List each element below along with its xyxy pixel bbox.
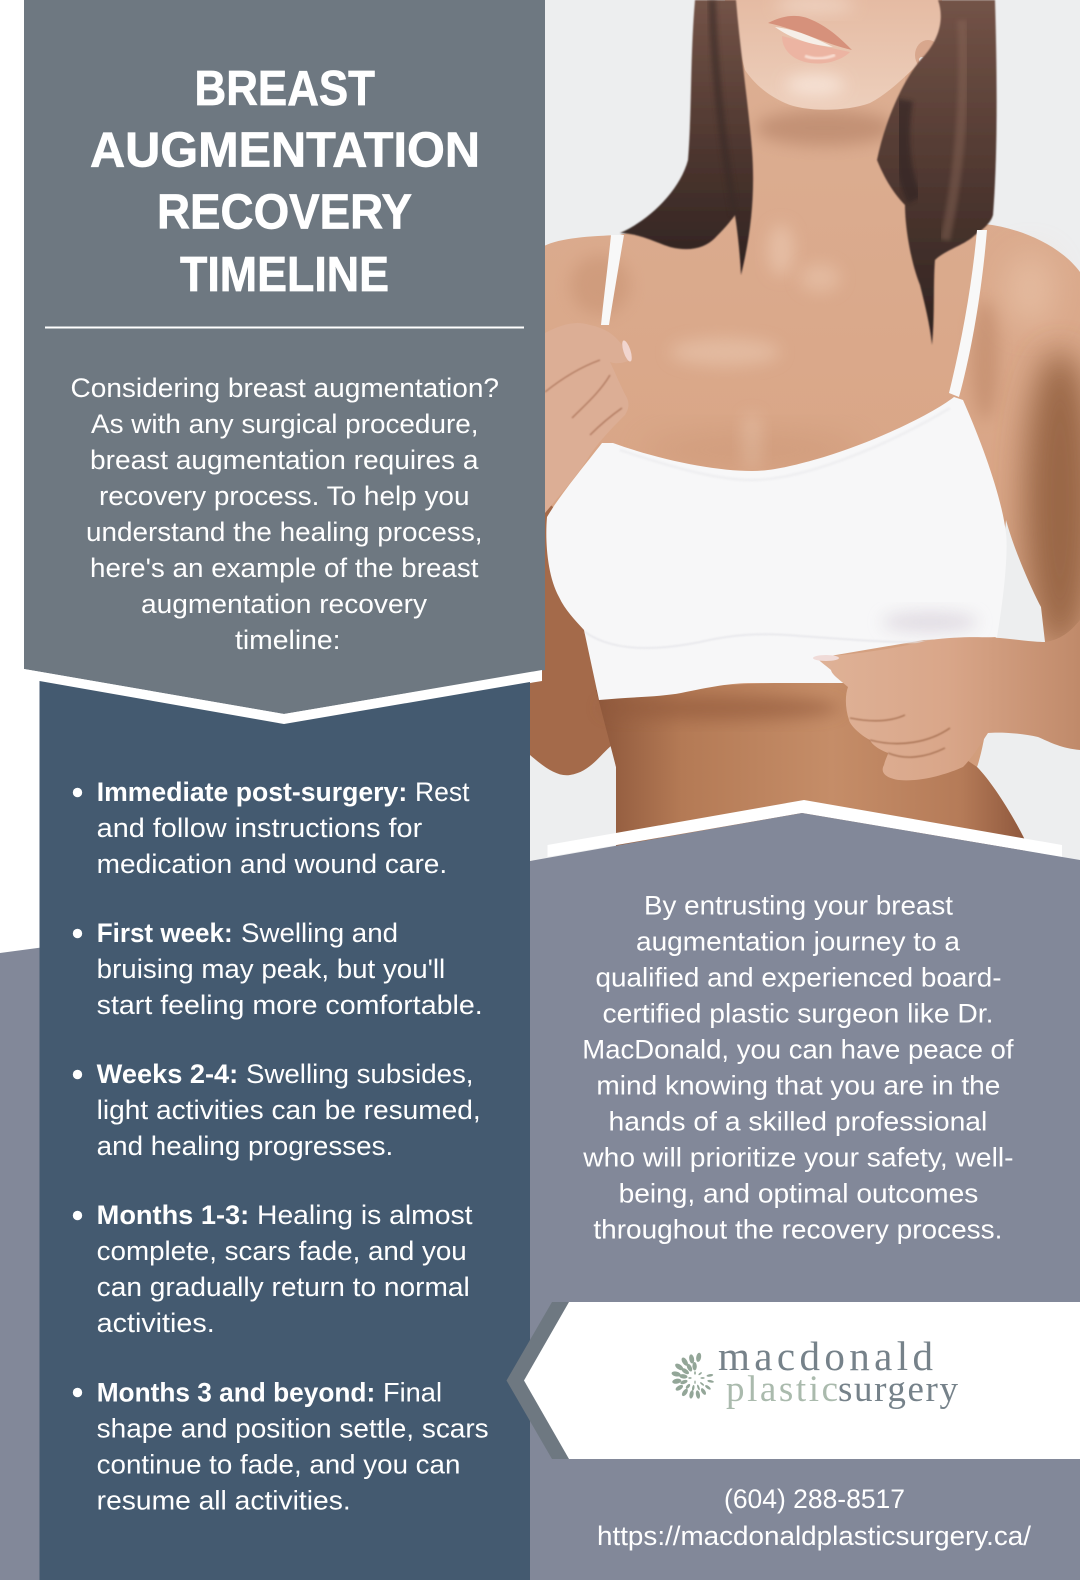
logo leaf mark <box>671 1352 714 1399</box>
bullet: immediate post-surgery: Rest <box>415 777 470 807</box>
white chevron stripe under title panel <box>24 669 542 724</box>
closing text <box>582 891 1014 1245</box>
contact details <box>597 1484 1032 1551</box>
neck behind face <box>740 56 918 84</box>
closing text: mind knowing that you are in the <box>596 1071 1000 1101</box>
intro text: breast augmentation requires a <box>90 445 480 475</box>
closing text: MacDonald, you can have peace of <box>582 1035 1014 1065</box>
title: TIMELINE <box>180 248 389 302</box>
intro text: augmentation recovery <box>141 589 428 619</box>
intro text: recovery process. To help you <box>99 481 470 511</box>
bullet: weeks 2-4 <box>73 1059 481 1161</box>
left hand <box>545 323 632 513</box>
closing text: being, and optimal outcomes <box>619 1179 978 1209</box>
title: RECOVERY <box>157 186 412 240</box>
contact details: (604) 288-8517 <box>724 1484 905 1514</box>
closing text: who will prioritize your safety, well- <box>582 1143 1014 1173</box>
lower-left background band <box>0 947 45 1580</box>
logo: macdonald plastic surgery: surgery <box>838 1369 958 1410</box>
bra straps <box>601 230 987 397</box>
intro text: As with any surgical procedure, <box>91 409 478 439</box>
intro text <box>70 373 499 655</box>
intro text: timeline: <box>235 625 340 655</box>
photo: woman in white bra <box>530 0 1080 870</box>
face <box>725 0 942 110</box>
lips <box>768 16 852 64</box>
title <box>90 62 480 302</box>
bullet: months 3 and beyond: continue to fade, and you can <box>97 1450 460 1480</box>
hair left <box>620 0 753 275</box>
closing text: throughout the recovery process. <box>593 1215 1002 1245</box>
bullet: months 3 and beyond: Months 3 and beyond: <box>97 1378 375 1408</box>
bullet: months 1-3: can gradually return to normal <box>97 1272 470 1302</box>
panel: title and intro <box>24 0 545 714</box>
skin shading and highlights <box>570 110 1080 720</box>
bullet: immediate post-surgery <box>73 777 470 879</box>
bullet: months 1-3: activities. <box>97 1308 215 1338</box>
white chevron stripe above closing panel <box>548 800 1062 857</box>
bullet: months 1-3: Healing is almost <box>257 1200 473 1230</box>
bullet: months 3 and beyond: shape and position settle, scars <box>97 1414 489 1444</box>
bullet: weeks 2-4: light activities can be resumed, <box>97 1095 481 1125</box>
contact details: https://macdonaldplasticsurgery.ca/ <box>597 1521 1032 1551</box>
bullet: months 1-3 <box>73 1200 473 1338</box>
bullet: weeks 2-4: and healing progresses. <box>97 1131 393 1161</box>
title: AUGMENTATION <box>90 124 480 178</box>
bullet: months 1-3: complete, scars fade, and you <box>97 1236 467 1266</box>
hair right <box>877 0 997 345</box>
closing text: certified plastic surgeon like Dr. <box>602 999 994 1029</box>
logo banner <box>506 1302 1080 1459</box>
bullet: months 3 and beyond <box>73 1378 489 1516</box>
intro text: here's an example of the breast <box>90 553 479 583</box>
torso, chest and right arm <box>545 224 1080 838</box>
bullet: weeks 2-4: Swelling subsides, <box>246 1059 474 1089</box>
bullet: months 3 and beyond: Final <box>383 1378 442 1408</box>
intro text: Considering breast augmentation? <box>70 373 499 403</box>
bullet: weeks 2-4: Weeks 2-4: <box>97 1059 238 1089</box>
lower torso <box>596 683 1025 851</box>
bullet: immediate post-surgery: medication and wound care. <box>97 849 447 879</box>
bullet: months 1-3: Months 1-3: <box>97 1200 249 1230</box>
white bra <box>546 397 1007 700</box>
bullet: immediate post-surgery: and follow instructions for <box>97 813 422 843</box>
bullet: months 3 and beyond: resume all activities. <box>97 1486 351 1516</box>
intro text: understand the healing process, <box>86 517 482 547</box>
left arm <box>530 500 612 775</box>
logo: macdonald plastic surgery: plastic <box>726 1369 838 1410</box>
bullet: first week: bruising may peak, but you'll <box>97 954 445 984</box>
closing text: augmentation journey to a <box>636 927 961 957</box>
bullet: first week <box>73 918 483 1020</box>
bullet: first week: Swelling and <box>241 918 398 948</box>
right hand and forearm <box>816 620 1080 780</box>
panel: recovery timeline list <box>40 681 530 1580</box>
background gap beside torso <box>995 520 1045 645</box>
bullet: immediate post-surgery: Immediate post-surgery: <box>97 777 407 807</box>
ear and earring <box>915 40 934 64</box>
title: BREAST <box>194 62 375 116</box>
closing text: hands of a skilled professional <box>608 1107 987 1137</box>
logo: macdonald plastic surgery <box>671 1333 958 1410</box>
bullet: first week: start feeling more comfortable. <box>97 990 483 1020</box>
closing text: qualified and experienced board- <box>596 963 1002 993</box>
closing text: By entrusting your breast <box>644 891 954 921</box>
panel: closing statement and contact <box>530 813 1080 1580</box>
logo wordmark: macdonald <box>718 1333 933 1379</box>
bullet: first week: First week: <box>97 918 233 948</box>
